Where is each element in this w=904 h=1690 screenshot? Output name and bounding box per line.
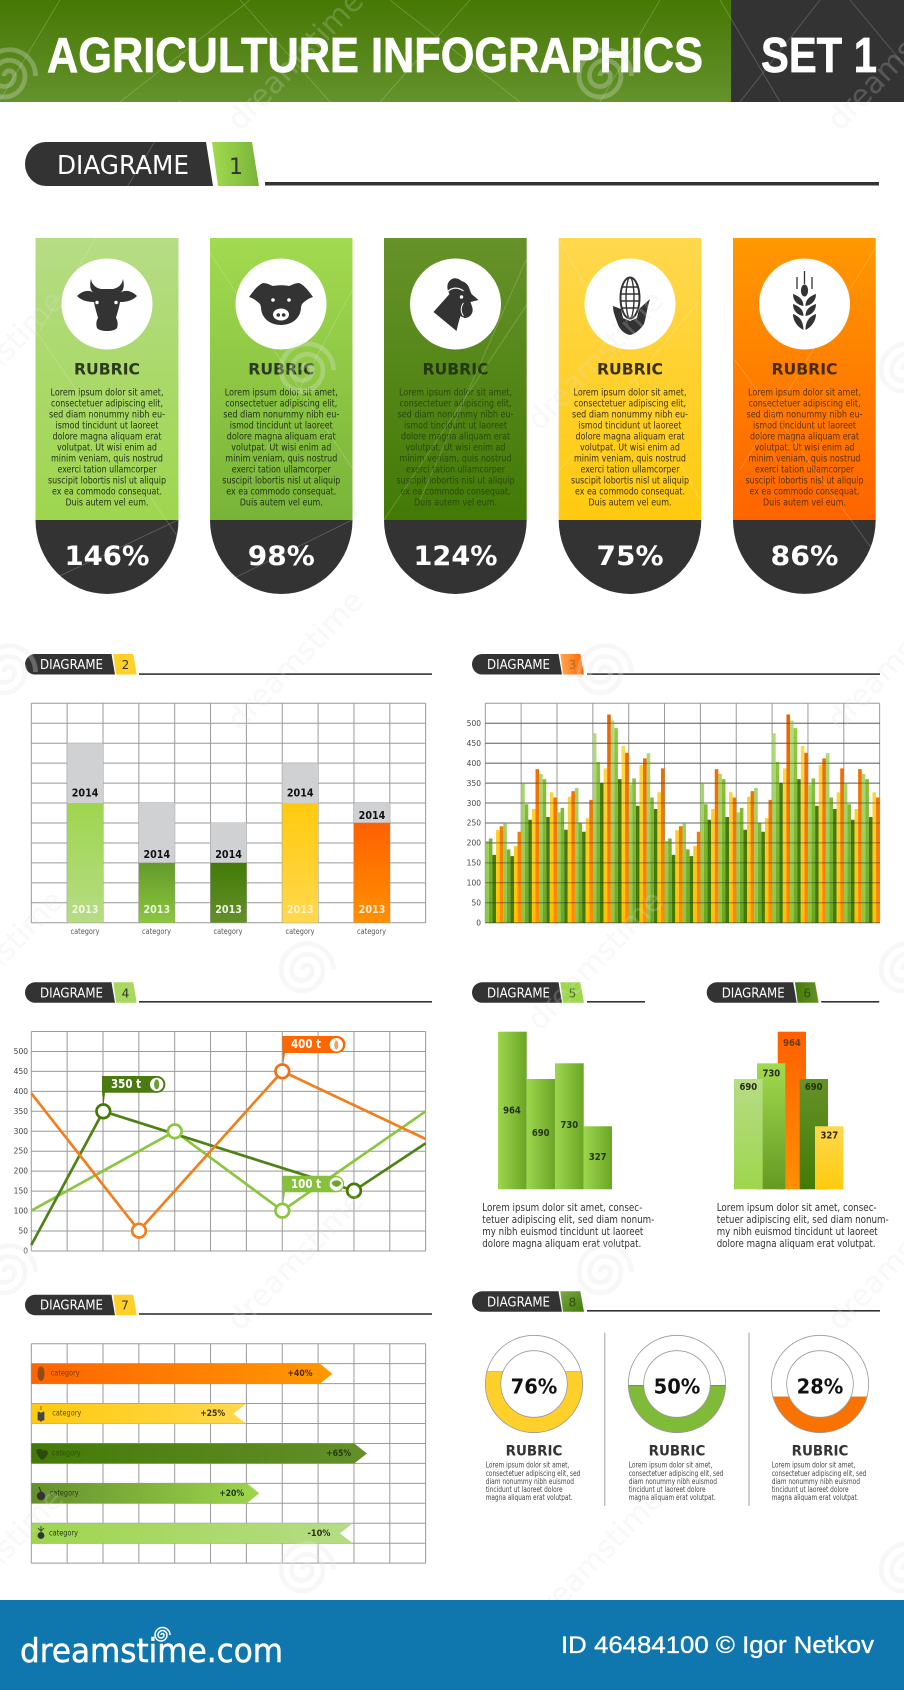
text block: diagrame 5: Lorem ipsum dolor sit amet, consec- xyxy=(482,1202,643,1214)
text block: suscipit lobortis nisl ut aliquip xyxy=(571,476,689,486)
values: 327 xyxy=(589,1152,607,1163)
text block: dolore magna aliquam erat xyxy=(52,432,162,442)
text block: consectetuer adipiscing elit, xyxy=(748,398,860,410)
icon: wheat xyxy=(793,271,816,330)
text block xyxy=(222,388,340,508)
donut chart: 50%: 50% xyxy=(654,1374,700,1398)
icon: pig xyxy=(249,283,313,325)
arrow: +40%: +40% xyxy=(288,1369,313,1379)
section heading: diagrame 8: 8 xyxy=(569,1295,576,1309)
line: orange series xyxy=(31,1071,426,1231)
divider left xyxy=(604,1333,605,1506)
text block: ismod tincidunt ut laoreet xyxy=(578,420,682,432)
text block: magna aliquam erat volutpat. xyxy=(486,1493,573,1502)
header banner xyxy=(0,0,904,102)
section heading: diagrame 6: 6 xyxy=(803,986,811,1000)
donut chart: 28%: 28% xyxy=(797,1374,843,1398)
axis labels: 450 xyxy=(14,1067,28,1076)
heading: RUBRIC xyxy=(649,1444,705,1460)
text block: minim veniam, quis nostrud xyxy=(225,454,337,464)
axis labels xyxy=(467,719,481,927)
text block: volutpat. Ut wisi enim ad xyxy=(580,442,680,454)
section heading: diagrame 2: 2 xyxy=(122,658,129,672)
heading: RUBRIC xyxy=(74,360,140,378)
text block xyxy=(772,1461,866,1502)
arrow: +25%: +25% xyxy=(200,1409,226,1419)
panel: card 2 pig xyxy=(210,238,352,594)
bar: category 5 xyxy=(354,803,390,923)
watermark overlay: dreamstime xyxy=(221,584,371,738)
text block: Lorem ipsum dolor sit amet, xyxy=(629,1461,712,1470)
text block: ex ea commodo consequat. xyxy=(575,486,685,498)
arrow: +40%: category xyxy=(51,1369,80,1378)
value: 86% xyxy=(770,541,838,572)
text block: volutpat. Ut wisi enim ad xyxy=(231,442,331,454)
watermark overlay: dreamstime xyxy=(521,884,671,1038)
axis labels: 350 xyxy=(14,1107,28,1116)
axis labels: 200 xyxy=(14,1167,28,1176)
axis labels: 450 xyxy=(467,739,481,748)
axis labels: 400 xyxy=(467,759,481,768)
text block: diam nonummy nibh euismod xyxy=(629,1477,717,1486)
arrow: +20%: category xyxy=(50,1489,79,1498)
values xyxy=(503,1105,607,1163)
footer bar xyxy=(0,1600,904,1690)
arrow: +20%: +20% xyxy=(219,1489,245,1499)
section heading: diagrame 6 xyxy=(707,982,879,1003)
flag: 350 t xyxy=(102,1076,165,1106)
value: 75% xyxy=(596,541,664,572)
panel: card 4 corn xyxy=(559,238,701,594)
axis labels: 500 xyxy=(467,719,481,728)
text block: Duis autem vel eum. xyxy=(414,498,497,508)
arrow: +40% xyxy=(31,1364,332,1384)
text block: diagrame 6: Lorem ipsum dolor sit amet, consec- xyxy=(717,1202,877,1214)
arrow: +65% xyxy=(31,1444,367,1463)
axis labels: 50 xyxy=(18,1226,28,1236)
text block: consectetuer adipiscing elit, xyxy=(574,398,686,410)
text block: exerci tation ullamcorper xyxy=(406,464,506,476)
text block: diagrame 5: my nibh euismod tincidunt ut laoreet xyxy=(482,1226,643,1238)
text block xyxy=(48,388,166,508)
section heading: diagrame 5: 5 xyxy=(569,986,576,1000)
data markers xyxy=(96,1064,361,1237)
text block: Lorem ipsum dolor sit amet, xyxy=(748,388,861,398)
line: dark green series xyxy=(31,1111,426,1245)
bar: category 5: 2013 xyxy=(359,904,385,916)
values: 730 xyxy=(560,1120,578,1131)
text block: diagrame 6: my nibh euismod tincidunt ut laoreet xyxy=(717,1226,878,1238)
text block: Duis autem vel eum. xyxy=(66,498,148,508)
text block: sed diam nonummy nibh eu- xyxy=(398,410,514,420)
text block: ex ea commodo consequat. xyxy=(750,486,860,498)
text block: volutpat. Ut wisi enim ad xyxy=(57,442,157,454)
values: 964 xyxy=(503,1105,521,1116)
logo text: dreamstime.com xyxy=(20,1631,283,1670)
axis labels: category xyxy=(142,927,171,936)
axis labels: 0 xyxy=(23,1246,28,1255)
arrow bar chart: diagrame 7 xyxy=(31,1344,426,1563)
section heading: diagrame 4: 4 xyxy=(122,986,129,1000)
axis labels: category xyxy=(70,927,100,936)
title: AGRICULTURE INFOGRAPHICS xyxy=(47,29,703,83)
section heading: diagrame 8: DIAGRAME xyxy=(487,1294,550,1310)
text block: exerci tation ullamcorper xyxy=(580,464,680,476)
text block: sed diam nonummy nibh eu- xyxy=(223,410,340,420)
values: 690 xyxy=(805,1082,823,1093)
axis labels: 0 xyxy=(476,918,481,927)
icon: corn xyxy=(613,278,650,335)
axis labels: 300 xyxy=(467,799,481,808)
bar: category 2 xyxy=(139,803,175,923)
text block: Lorem ipsum dolor sit amet, xyxy=(399,388,512,398)
logo spiral xyxy=(155,1628,170,1641)
bar: category 1: 2014 xyxy=(72,788,98,800)
text block: consectetuer adipiscing elit, xyxy=(400,398,512,410)
text block: ex ea commodo consequat. xyxy=(52,486,162,498)
text block: consectetuer adipiscing elit, sed xyxy=(629,1469,723,1478)
text block: tincidunt ut laoreet dolore xyxy=(772,1485,849,1494)
line chart: diagrame 4 xyxy=(14,1032,426,1255)
line: light green series xyxy=(31,1111,426,1211)
section heading: diagrame 4: DIAGRAME xyxy=(40,985,103,1001)
text block: suscipit lobortis nisl ut aliquip xyxy=(396,476,514,486)
arrow: -10%: -10% xyxy=(308,1529,331,1539)
section heading: diagrame 1: DIAGRAME xyxy=(57,151,189,181)
flag: 100 t xyxy=(282,1176,344,1205)
bar: category 3: 2013 xyxy=(215,904,242,916)
flag: 400 t: 400 t xyxy=(291,1037,321,1051)
section heading: diagrame 6: DIAGRAME xyxy=(722,985,785,1001)
text block: consectetuer adipiscing elit, xyxy=(51,398,163,410)
flag: 350 t: 350 t xyxy=(111,1077,141,1091)
bar: category 1: 2013 xyxy=(72,904,98,916)
watermark overlay: dreamstime xyxy=(521,284,671,438)
section heading: diagrame 3: 3 xyxy=(569,658,576,672)
section heading: diagrame 2 xyxy=(25,654,432,675)
text block: diagrame 5: tetuer adipiscing elit, sed diam nonum- xyxy=(482,1214,655,1226)
text block: ismod tincidunt ut laoreet xyxy=(230,420,333,432)
axis labels: 400 xyxy=(14,1087,28,1096)
text block: diam nonummy nibh euismod xyxy=(772,1477,860,1486)
flag: 400 t xyxy=(282,1036,346,1066)
text block: sed diam nonummy nibh eu- xyxy=(572,410,688,420)
axis labels: category xyxy=(214,927,243,936)
text block: dolore magna aliquam erat xyxy=(750,432,859,442)
text block: exerci tation ullamcorper xyxy=(755,464,855,476)
watermark overlay: dreamstime xyxy=(221,1184,371,1338)
bar: category 3: 2014 xyxy=(215,849,242,861)
text block: Lorem ipsum dolor sit amet, xyxy=(50,388,164,398)
section heading: diagrame 5 xyxy=(472,982,645,1003)
text block: minim veniam, quis nostrud xyxy=(574,454,686,464)
text block: dolore magna aliquam erat xyxy=(227,432,336,442)
arrow: +65%: category xyxy=(52,1449,81,1458)
axis labels: 100 xyxy=(14,1206,28,1216)
axis labels: 350 xyxy=(467,779,481,788)
value: 124% xyxy=(414,541,498,572)
text block: dolore magna aliquam erat xyxy=(576,432,685,442)
text block: minim veniam, quis nostrud xyxy=(748,454,860,464)
bar: category 2: 2014 xyxy=(143,849,170,861)
section heading: diagrame 3 xyxy=(472,654,880,675)
arrow: +25%: category xyxy=(52,1409,82,1418)
bar: category 4: 2014 xyxy=(287,788,314,800)
axis labels: 250 xyxy=(467,819,481,828)
heading: RUBRIC xyxy=(792,1444,848,1460)
donut chart: 76% xyxy=(485,1335,583,1502)
donut chart: 76%: 76% xyxy=(511,1374,557,1398)
text block: exerci tation ullamcorper xyxy=(58,464,157,476)
text block: volutpat. Ut wisi enim ad xyxy=(406,442,506,454)
text block: ex ea commodo consequat. xyxy=(226,486,336,498)
divider right xyxy=(748,1333,750,1506)
section heading: diagrame 7: DIAGRAME xyxy=(40,1298,103,1314)
axis labels: 150 xyxy=(467,859,481,868)
section heading: diagrame 7: 7 xyxy=(121,1299,129,1313)
text block: magna aliquam erat volutpat. xyxy=(629,1493,716,1502)
text block: consectetuer adipiscing elit, sed xyxy=(772,1469,866,1478)
axis labels xyxy=(70,927,386,936)
arrow: +20% xyxy=(31,1483,259,1503)
value: 146% xyxy=(64,541,150,572)
axis labels: 50 xyxy=(471,898,481,908)
text block xyxy=(396,388,514,508)
bar: category 3 xyxy=(211,823,247,923)
text block: tincidunt ut laoreet dolore xyxy=(629,1485,706,1494)
heading: RUBRIC xyxy=(248,360,314,378)
arrow: -10% xyxy=(31,1523,353,1543)
text block: ismod tincidunt ut laoreet xyxy=(56,420,159,432)
text block: Duis autem vel eum. xyxy=(240,498,323,508)
section heading: diagrame 8 xyxy=(472,1291,880,1312)
panel: card 5 wheat xyxy=(733,238,876,594)
axis labels: 200 xyxy=(467,839,481,848)
text block: consectetuer adipiscing elit, xyxy=(225,398,337,410)
bar: category 1 xyxy=(67,743,103,923)
values: 690 xyxy=(532,1128,550,1139)
bars xyxy=(485,715,880,923)
text block: magna aliquam erat volutpat. xyxy=(772,1493,859,1502)
text block: Lorem ipsum dolor sit amet, xyxy=(772,1461,855,1470)
axis labels xyxy=(14,1047,28,1255)
bar: category 4: 2013 xyxy=(287,904,314,916)
text block: diagrame 6: dolore magna aliquam erat volutpat. xyxy=(717,1238,876,1250)
text block: suscipit lobortis nisl ut aliquip xyxy=(222,476,340,486)
text block: Duis autem vel eum. xyxy=(588,498,672,508)
text block: diagrame 5: dolore magna aliquam erat volutpat. xyxy=(482,1238,641,1250)
heading: RUBRIC xyxy=(422,360,488,378)
bar chart: diagrame 5 xyxy=(498,1032,612,1189)
donut chart: 28% xyxy=(771,1335,869,1502)
text block: volutpat. Ut wisi enim ad xyxy=(754,442,854,454)
text block xyxy=(629,1461,723,1502)
values: 690 xyxy=(739,1082,757,1093)
text block: suscipit lobortis nisl ut aliquip xyxy=(746,476,864,486)
text block: minim veniam, quis nostrud xyxy=(51,454,163,464)
heading: RUBRIC xyxy=(506,1444,562,1460)
bar: category 5: 2014 xyxy=(359,810,385,822)
text block: Lorem ipsum dolor sit amet, xyxy=(486,1461,569,1470)
axis labels: 100 xyxy=(467,878,481,888)
text block xyxy=(746,388,864,508)
section heading: diagrame 4 xyxy=(25,982,432,1003)
text block: diam nonummy nibh euismod xyxy=(486,1477,574,1486)
text block: exerci tation ullamcorper xyxy=(232,464,331,476)
bar chart: diagrame 3 xyxy=(467,703,880,927)
icon: cow xyxy=(77,279,137,331)
arrow: +25% xyxy=(31,1404,246,1424)
arrow: -10%: category xyxy=(49,1529,78,1538)
section heading: diagrame 7 xyxy=(25,1295,432,1315)
image id and credit: ID 46484100 © Igor Netkov xyxy=(561,1632,874,1659)
axis labels: category xyxy=(286,927,315,936)
icon: chicken xyxy=(434,278,478,331)
text block: sed diam nonummy nibh eu- xyxy=(746,410,863,420)
text block: tincidunt ut laoreet dolore xyxy=(486,1485,563,1494)
arrow: +65%: +65% xyxy=(326,1449,352,1459)
axis labels: category xyxy=(357,927,386,936)
values: 964 xyxy=(783,1038,801,1049)
values: 730 xyxy=(762,1069,780,1080)
section heading: diagrame 3: DIAGRAME xyxy=(487,657,550,673)
axis labels: 300 xyxy=(14,1127,28,1136)
bar chart: diagrame 2 xyxy=(31,703,426,936)
heading: RUBRIC xyxy=(597,360,663,378)
text block: consectetuer adipiscing elit, sed xyxy=(486,1469,580,1478)
heading: RUBRIC xyxy=(772,360,838,378)
values xyxy=(739,1038,838,1142)
watermark overlay: dreamstime xyxy=(521,1482,671,1636)
text block: ex ea commodo consequat. xyxy=(400,486,510,498)
set label: SET 1 xyxy=(761,29,877,83)
donut chart: 50% xyxy=(628,1335,726,1502)
section heading: diagrame 2: DIAGRAME xyxy=(40,657,103,673)
section heading: diagrame 1: 1 xyxy=(229,155,243,180)
text block: Lorem ipsum dolor sit amet, xyxy=(574,388,686,398)
flag: 100 t: 100 t xyxy=(291,1177,321,1191)
bar: category 4 xyxy=(282,763,318,923)
values: 327 xyxy=(820,1131,838,1142)
bar chart: diagrame 6 xyxy=(734,1032,843,1189)
bar: category 2: 2013 xyxy=(143,904,170,916)
text block xyxy=(486,1461,580,1502)
section heading: diagrame 5: DIAGRAME xyxy=(487,985,550,1001)
text block: Duis autem vel eum. xyxy=(763,498,846,508)
axis labels: 250 xyxy=(14,1147,28,1156)
value: 98% xyxy=(248,541,315,572)
panel: card 3 chicken xyxy=(384,238,527,594)
text block: dolore magna aliquam erat xyxy=(401,432,510,442)
text block: diagrame 5 xyxy=(482,1202,655,1250)
text block: Lorem ipsum dolor sit amet, xyxy=(225,388,338,398)
axis labels: 500 xyxy=(14,1047,28,1056)
axis labels: 150 xyxy=(14,1187,28,1196)
section heading: diagrame 1 xyxy=(25,142,879,186)
text block: diagrame 6 xyxy=(717,1202,889,1250)
text block: suscipit lobortis nisl ut aliquip xyxy=(48,476,166,486)
text block: minim veniam, quis nostrud xyxy=(400,454,512,464)
text block: sed diam nonummy nibh eu- xyxy=(49,410,165,420)
panel: card 1 cow xyxy=(36,238,178,594)
text block: ismod tincidunt ut laoreet xyxy=(753,420,856,432)
text block xyxy=(571,388,689,508)
text block: ismod tincidunt ut laoreet xyxy=(404,420,507,432)
